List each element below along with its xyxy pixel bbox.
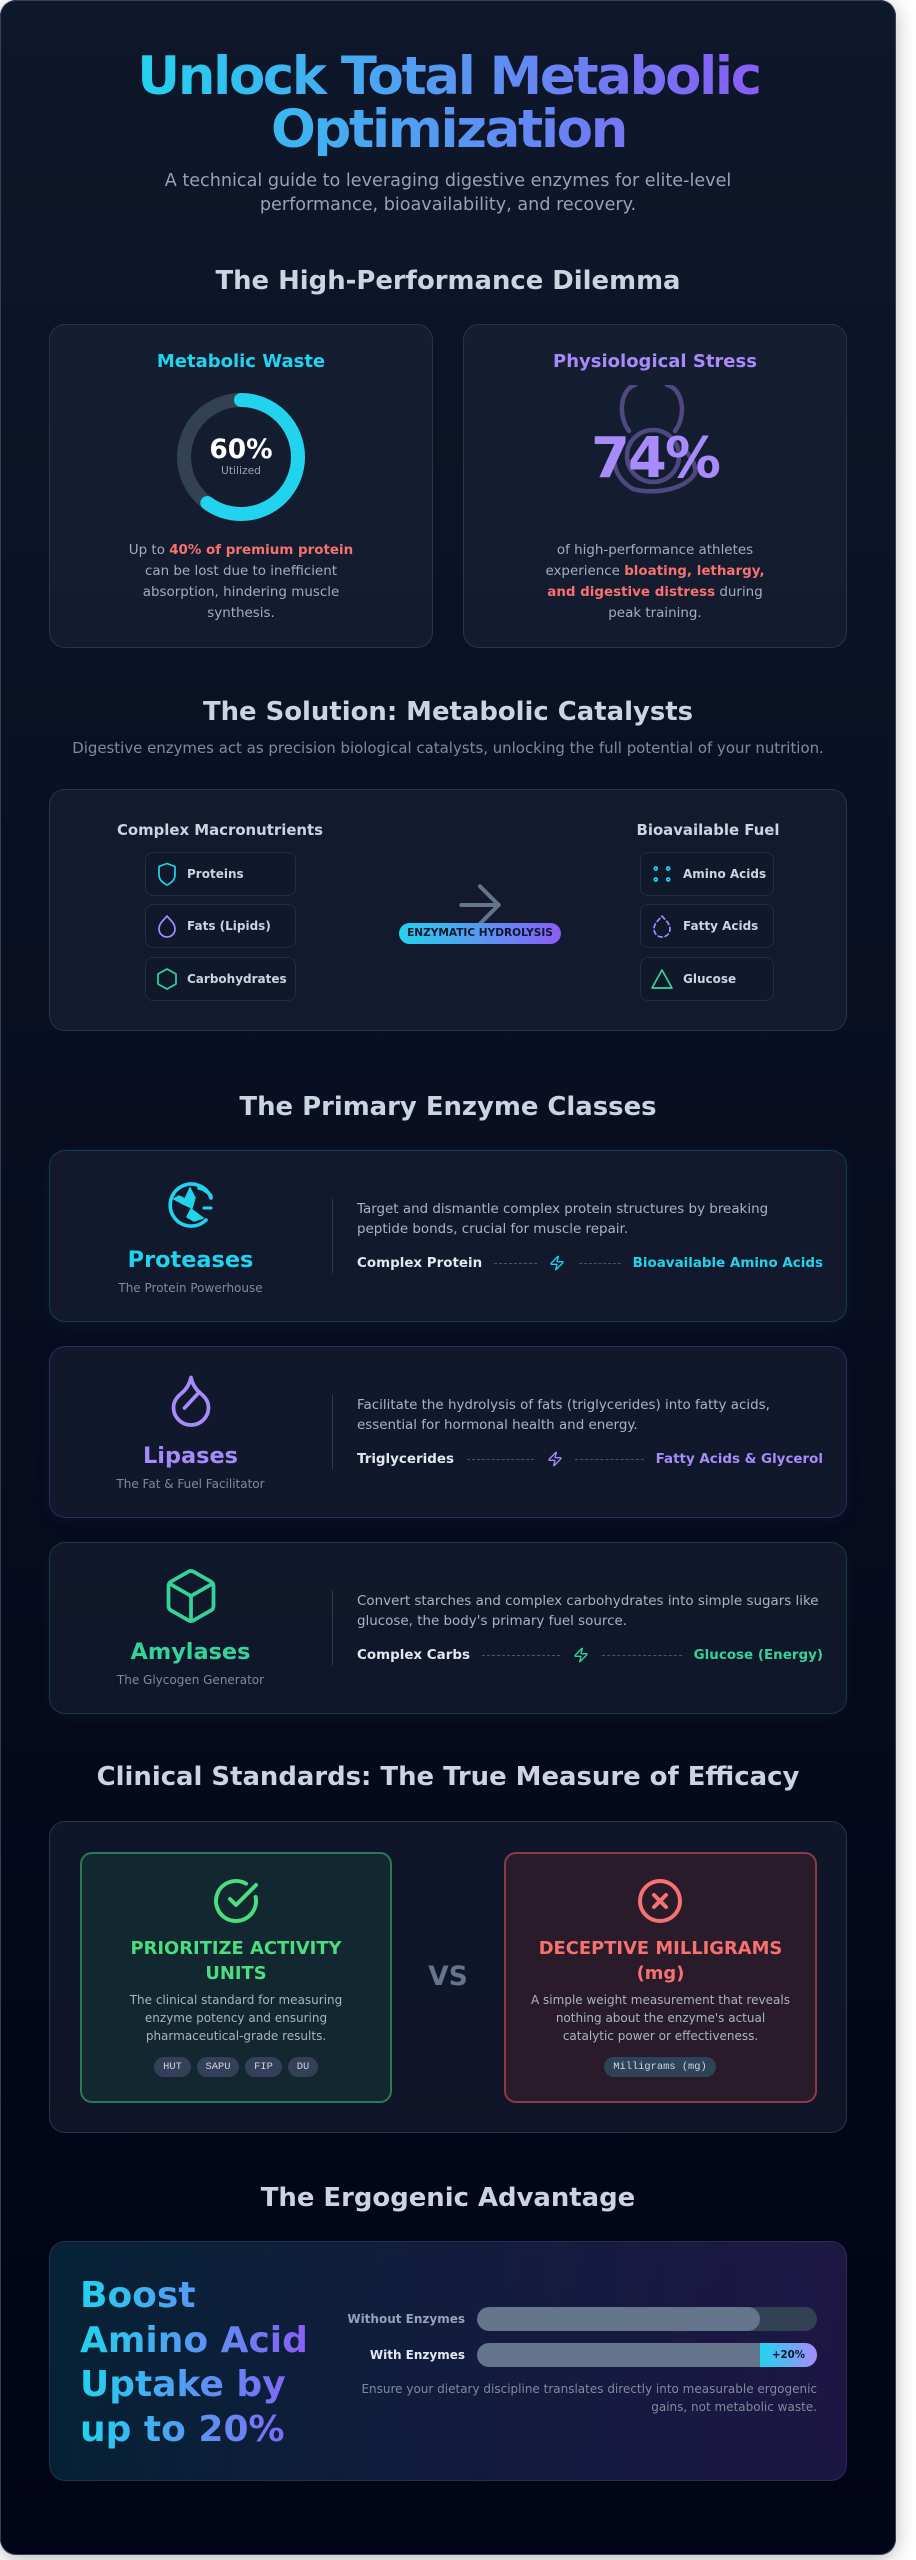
enzyme name: Proteases xyxy=(128,1247,253,1273)
card heading xyxy=(539,1938,782,1984)
panel: lipases xyxy=(49,1346,847,1518)
headline: boost uptake xyxy=(80,2274,310,2453)
item: fats xyxy=(145,904,296,948)
description: athletes distress: peak training. xyxy=(608,606,702,621)
flow: output: Fatty Acids & Glycerol xyxy=(656,1452,823,1467)
solution subtitle: Digestive enzymes act as precision biological catalysts, unlocking the full potential of your nutrition. xyxy=(72,739,824,757)
card description xyxy=(130,1993,342,2043)
icon: protease xyxy=(168,1182,213,1228)
card heading: UNITS xyxy=(205,1963,267,1984)
column heading: fuel: Bioavailable Fuel xyxy=(636,821,780,839)
title: Unlock Total Metabolic xyxy=(137,46,760,107)
headline: boost uptake: up to 20% xyxy=(80,2409,285,2450)
bar gain segment: +20% xyxy=(772,2349,805,2361)
description xyxy=(357,1398,770,1433)
description: protein loss xyxy=(129,543,353,621)
card heading: PRIORITIZE ACTIVITY xyxy=(131,1938,341,1959)
heading: solution: The Solution: Metabolic Catalysts xyxy=(203,696,693,726)
icon: hexagon xyxy=(157,968,177,990)
subtitle: A technical guide to leveraging digestive enzymes for elite-level xyxy=(165,171,731,191)
heading: enzyme classes: The Primary Enzyme Classes xyxy=(239,1092,657,1122)
icon: four dots xyxy=(654,866,670,882)
card description: The clinical standard for measuring xyxy=(130,1993,342,2007)
tag: SAPU xyxy=(197,2057,239,2077)
note xyxy=(361,2382,817,2414)
card heading: (mg) xyxy=(637,1963,684,1984)
bar label: with: With Enzymes xyxy=(370,2348,465,2362)
description: athletes distress: and digestive distress during xyxy=(547,585,763,600)
panel: metabolic waste xyxy=(49,324,433,648)
item: proteins xyxy=(145,852,296,896)
card description: nothing about the enzyme's actual xyxy=(556,2011,765,2025)
tag: milligrams xyxy=(604,2057,716,2077)
item: proteins: Proteins xyxy=(187,867,244,881)
note: Ensure your dietary discipline translates directly into measurable ergogenic xyxy=(361,2382,817,2396)
donut value: 60% xyxy=(209,434,273,464)
divider xyxy=(332,1395,333,1469)
column heading: macronutrients: Complex Macronutrients xyxy=(117,821,323,839)
versus label: VS xyxy=(428,1961,468,1992)
card heading: DECEPTIVE MILLIGRAMS xyxy=(539,1938,782,1959)
enzyme name: Lipases xyxy=(143,1443,238,1469)
pill: enzymatic hydrolysis xyxy=(399,923,561,944)
item: carbohydrates: Carbohydrates xyxy=(187,972,287,986)
icon: droplet xyxy=(158,915,176,938)
card description: enzyme potency and ensuring xyxy=(145,2011,327,2025)
description: Facilitate the hydrolysis of fats (triglycerides) into fatty acids, xyxy=(357,1398,770,1412)
description: protein loss: synthesis. xyxy=(207,606,275,621)
bar: without enzymes xyxy=(477,2307,817,2331)
subtitle: performance, bioavailability, and recovery. xyxy=(260,195,636,215)
description: protein loss: can be lost due to inefficient xyxy=(145,564,337,579)
headline: boost uptake: Amino Acid xyxy=(80,2320,308,2361)
description: protein loss: Up to 40% of premium protein xyxy=(129,543,353,558)
description: essential for hormonal health and energy. xyxy=(357,1418,638,1433)
tag: DU: DU xyxy=(297,2061,309,2073)
tag: milligrams: Milligrams (mg) xyxy=(613,2061,707,2073)
heading: ergogenic advantage: The Ergogenic Advantage xyxy=(261,2182,635,2212)
icon: dashed droplet xyxy=(653,915,671,938)
item: amino acids: Amino Acids xyxy=(683,867,766,881)
description xyxy=(357,1594,819,1629)
card description: A simple weight measurement that reveals xyxy=(531,1993,790,2007)
panel: comparison xyxy=(49,1821,847,2133)
tag: FIP: FIP xyxy=(254,2061,273,2073)
divider xyxy=(332,1591,333,1665)
panel: hydrolysis diagram xyxy=(49,789,847,1031)
item: fats: Fats (Lipids) xyxy=(187,919,271,933)
description: Target and dismantle complex protein structures by breaking xyxy=(357,1202,768,1216)
icon: zap xyxy=(548,1452,562,1466)
icon: triangle xyxy=(651,969,673,989)
icon: circle x xyxy=(638,1879,682,1923)
tag: HUT: HUT xyxy=(163,2061,182,2073)
tag: DU xyxy=(288,2057,318,2077)
card heading: metabolic waste: Metabolic Waste xyxy=(157,350,325,372)
description: athletes distress: experience bloating, lethargy, xyxy=(545,564,765,579)
enzyme tagline: The Fat & Fuel Facilitator xyxy=(116,1477,265,1491)
item: amino acids xyxy=(640,852,774,896)
icon: zap xyxy=(550,1256,564,1270)
heading: clinical standards: Clinical Standards: The True Measure of Efficacy xyxy=(97,1762,799,1792)
headline: boost uptake: Boost xyxy=(80,2275,196,2316)
description: Convert starches and complex carbohydrates into simple sugars like xyxy=(357,1594,819,1608)
description xyxy=(356,1202,768,1237)
enzyme tagline: The Protein Powerhouse xyxy=(118,1281,263,1295)
tag: SAPU: SAPU xyxy=(206,2061,230,2073)
headline: boost uptake: Uptake by xyxy=(80,2364,286,2405)
description: athletes distress: of high-performance athletes xyxy=(557,543,753,558)
panel: advantage xyxy=(49,2241,847,2481)
tag: HUT xyxy=(154,2057,191,2077)
bar label: without: Without Enzymes xyxy=(347,2312,465,2326)
icon: box xyxy=(166,1569,216,1623)
bar fill xyxy=(477,2307,760,2331)
note: gains, not metabolic waste. xyxy=(651,2400,817,2414)
bar gain segment xyxy=(760,2343,817,2367)
panel: physiological stress xyxy=(463,324,847,648)
enzyme tagline: The Glycogen Generator xyxy=(117,1673,264,1687)
item: glucose: Glucose xyxy=(683,972,736,986)
icon: zap xyxy=(574,1648,588,1662)
flow: input: Complex Protein xyxy=(357,1256,482,1271)
flow: output: Bioavailable Amino Acids xyxy=(633,1256,823,1271)
icon: stomach outline xyxy=(614,385,698,494)
stat value: 74% xyxy=(591,426,719,491)
card heading xyxy=(131,1938,342,1984)
title xyxy=(135,50,762,156)
pill: enzymatic hydrolysis: ENZYMATIC HYDROLYSIS xyxy=(407,927,553,939)
divider xyxy=(332,1199,333,1273)
card description: pharmaceutical-grade results. xyxy=(146,2029,326,2043)
icon: circle check xyxy=(214,1879,258,1923)
icon: arrow right xyxy=(459,884,501,923)
card: activity units xyxy=(80,1852,392,2103)
panel: amylases xyxy=(49,1542,847,1714)
subtitle xyxy=(165,171,731,215)
description: protein loss: absorption, hindering muscle xyxy=(143,585,339,600)
item: fatty acids: Fatty Acids xyxy=(683,919,758,933)
description: athletes distress xyxy=(545,543,765,621)
tag: FIP xyxy=(245,2057,282,2077)
donut label: Utilized xyxy=(221,464,261,477)
donut chart: 60 percent utilized xyxy=(177,393,305,521)
item: glucose xyxy=(640,957,774,1001)
icon: droplet xyxy=(172,1376,210,1427)
flow: input: Complex Carbs xyxy=(357,1648,470,1663)
flow: input: Triglycerides xyxy=(357,1452,454,1467)
card description: catalytic power or effectiveness. xyxy=(563,2029,758,2043)
description: peptide bonds, crucial for muscle repair. xyxy=(357,1222,628,1237)
heading: dilemma: The High-Performance Dilemma xyxy=(215,266,681,296)
card heading: physiological stress: Physiological Stress xyxy=(553,350,757,372)
icon: shield xyxy=(158,862,176,886)
bar: with enzymes xyxy=(477,2343,817,2367)
item: carbohydrates xyxy=(145,957,296,1001)
item: fatty acids xyxy=(640,904,774,948)
description: glucose, the body's primary fuel source. xyxy=(357,1614,627,1629)
enzyme name: Amylases xyxy=(131,1639,250,1665)
card: milligrams xyxy=(504,1852,817,2103)
panel: proteases xyxy=(49,1150,847,1322)
flow: output: Glucose (Energy) xyxy=(694,1648,823,1663)
title: Optimization xyxy=(271,99,626,160)
card description xyxy=(531,1993,790,2043)
